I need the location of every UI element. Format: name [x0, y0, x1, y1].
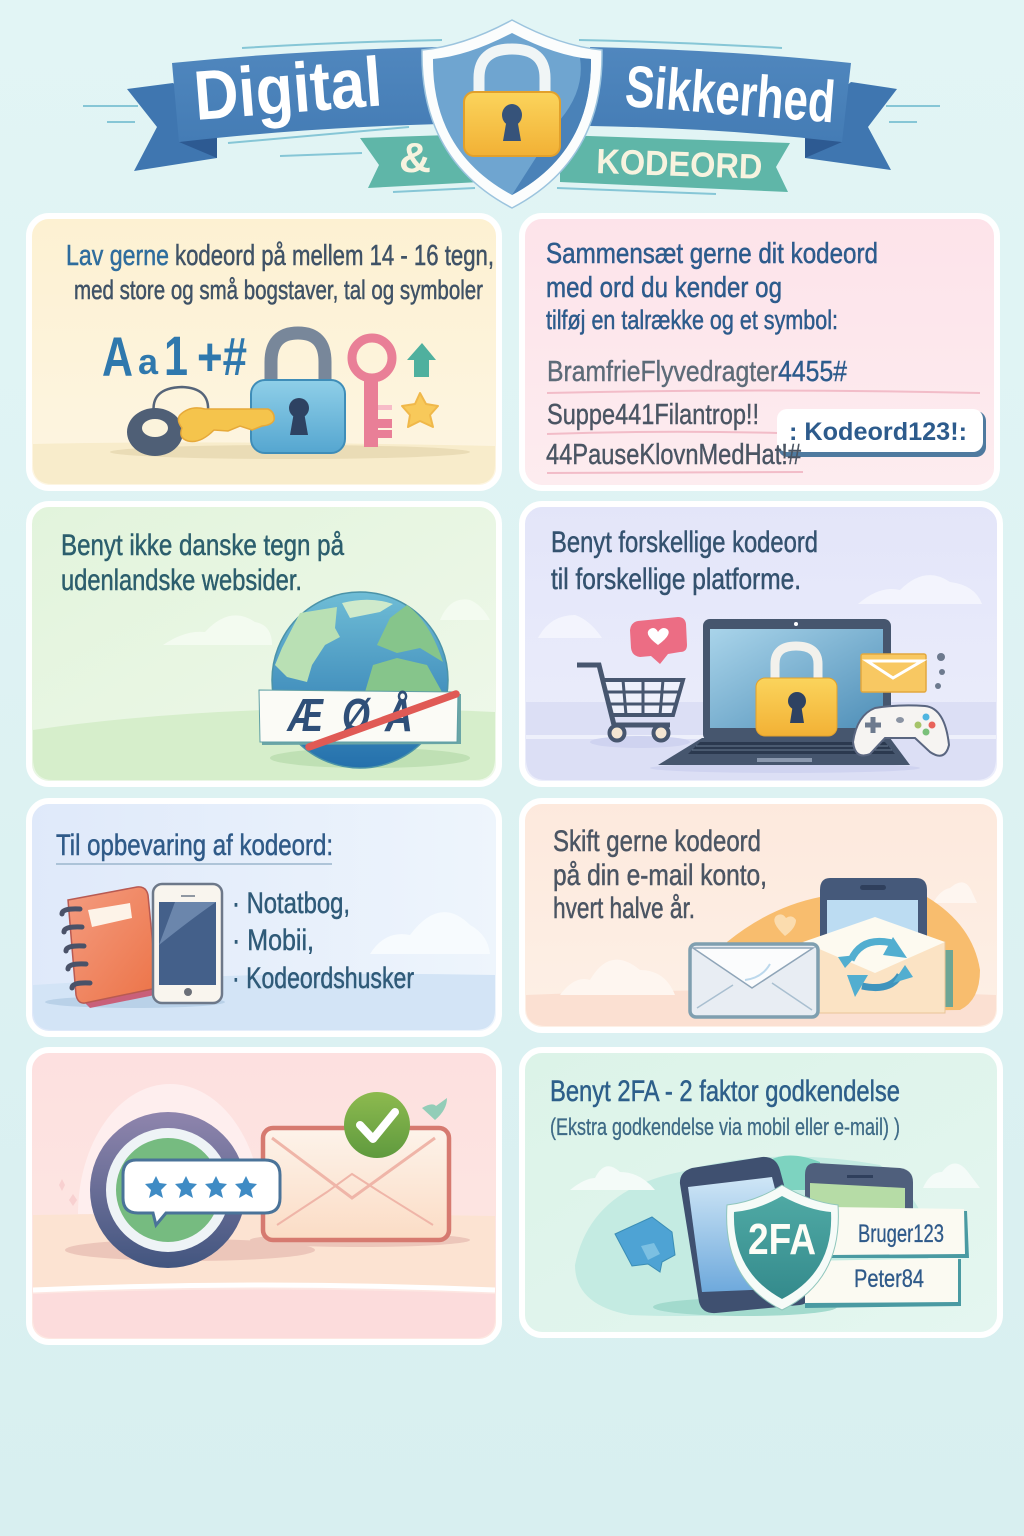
icon: up arrow [407, 343, 436, 377]
icon: key ring [110, 387, 470, 459]
example passwords: BramfrieFlyvedragter4455# [547, 356, 847, 388]
characters Aa1+#: 1 [164, 324, 188, 387]
icon: orange blob [727, 897, 980, 1012]
icon: front phone [680, 1157, 812, 1313]
panel: storage [29, 801, 499, 1034]
icon: envelope with check [250, 1092, 470, 1247]
heading: ampersand: & [399, 134, 431, 181]
callout: Kodeord123 [777, 409, 986, 457]
icon: heart bubble [630, 617, 687, 664]
list: storage options: · Mobii, [232, 924, 314, 957]
text: no Danish characters: udenlandske websider. [61, 564, 302, 597]
icon: blue padlock [251, 333, 345, 453]
text: length advice: Lav gerne [66, 240, 169, 272]
icon: golden key [178, 408, 274, 442]
ribbon tails [127, 83, 217, 171]
text: no Danish characters: Benyt ikke danske tegn på [61, 529, 344, 562]
icon: notebook [45, 887, 225, 1008]
ribbon left [172, 47, 440, 142]
icon: back phone [805, 1163, 913, 1245]
panel: different passwords [522, 504, 1000, 784]
text: 2FA heading: Benyt 2FA - 2 faktor godkendelse [550, 1075, 900, 1108]
heading: storage: Til opbevaring af kodeord: [56, 829, 333, 862]
list: storage options: · Notatbog, [232, 887, 350, 920]
icon: star [402, 393, 438, 427]
icon: phone [153, 884, 222, 1003]
ribbon right [590, 47, 851, 142]
example passwords [546, 356, 980, 473]
icon: sparkles [59, 1179, 77, 1206]
panel: 2FA [522, 1050, 1000, 1335]
icon: envelope [861, 653, 945, 692]
heading: Digital: Digital [191, 42, 385, 135]
panel: verified email [29, 1050, 499, 1342]
icon: laptop with padlock [650, 619, 920, 773]
credential labels [805, 1207, 969, 1308]
list: storage options: · Kodeordshusker [232, 962, 414, 995]
heading: Kodeord: KODEORD [596, 142, 763, 187]
text: passphrase advice: tilføj en talrække og et symbol: [546, 305, 838, 335]
text: 2FA explanation: (Ekstra godkendelse via mobil eller e-mail) ) [550, 1114, 900, 1141]
text: length advice: kodeord på mellem 14 - 16 tegn, [175, 240, 494, 272]
padlock [479, 49, 545, 100]
icon: white envelope [690, 944, 818, 1017]
icon: open envelope with sync arrows [803, 917, 953, 1013]
sign: crossed out letters: Ø [342, 689, 372, 741]
example passwords: Suppe441Filantrop!! [547, 399, 759, 431]
icon: blue gem [615, 1217, 675, 1272]
text: character types: med store og små bogstaver, tal og symboler [74, 275, 483, 305]
rating bubble [123, 1160, 280, 1225]
shield [422, 20, 602, 208]
icon: 2FA shield [727, 1185, 838, 1310]
text: change password: hvert halve år. [553, 892, 695, 925]
icon: pink key [352, 338, 392, 447]
sign: crossed out letters: Å [384, 689, 413, 741]
sign: crossed out letters [259, 689, 461, 747]
icon: small heart [774, 914, 796, 936]
text: change password: på din e-mail konto, [553, 859, 767, 892]
panel: password length [29, 216, 499, 488]
panel: passphrases [522, 216, 997, 488]
icon: game controller [853, 705, 949, 756]
text: different passwords: Benyt forskellige kodeord [551, 526, 818, 559]
icon: globe [270, 592, 470, 768]
credential labels: Bruger123 [858, 1220, 944, 1248]
panel: no Danish characters [29, 504, 499, 784]
characters Aa1+#: A [102, 325, 133, 388]
credential labels: Peter84 [854, 1265, 924, 1293]
characters Aa1+#: +# [197, 327, 247, 387]
text: passphrase advice: Sammensæt gerne dit kodeord [546, 238, 878, 270]
text: change password: Skift gerne kodeord [553, 825, 761, 858]
sign: crossed out letters: Æ [286, 689, 325, 741]
icon: phone [820, 878, 927, 960]
icon: shopping cart [577, 665, 690, 748]
teal ribbons [360, 134, 480, 188]
characters Aa1+#: a [138, 341, 159, 382]
icon: badge with rating [65, 1112, 315, 1268]
title banner [83, 20, 940, 208]
text: different passwords: til forskellige platforme. [551, 563, 801, 596]
icon: 2FA shield: 2FA [748, 1215, 816, 1264]
text: passphrase advice: med ord du kender og [546, 272, 782, 304]
characters Aa1+# [102, 324, 247, 388]
example passwords: 44PauseKlovnMedHat!# [546, 439, 801, 471]
heading: Sikkerhed: Sikkerhed [623, 53, 838, 135]
callout: Kodeord123: : Kodeord123!: [789, 418, 967, 446]
panel: change email password [522, 801, 1000, 1030]
